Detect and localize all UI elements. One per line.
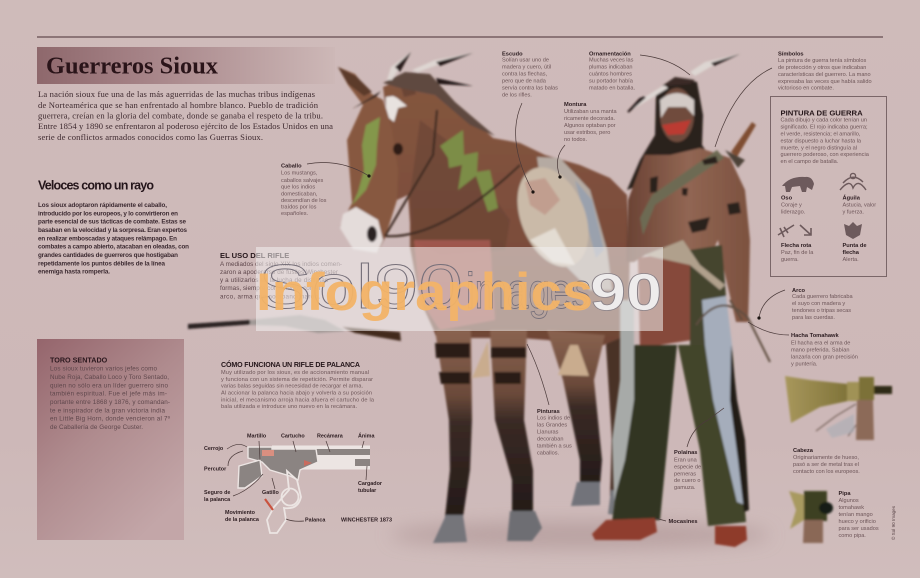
top rule [37, 36, 883, 38]
right chaps [702, 296, 745, 505]
panel: Pintura de guerra: muerte, y el negro distinguía al [780, 145, 857, 151]
callout: Montura [557, 102, 617, 179]
callout: Escudo: contra las flechas, [502, 72, 548, 78]
ground shadow [390, 521, 770, 549]
callout: Montura: Algunos optaban por [564, 123, 616, 129]
intro text: guerrera, creían en la gloria del combate, donde se ganaba el respeto de la tribu. [38, 110, 323, 120]
callout: Pinturas [527, 344, 572, 456]
text: Veloces: repetidamente los puntos débiles de la línea [38, 260, 165, 267]
panel: Pintura de guerra: Oso [781, 196, 793, 202]
front leg 2 [490, 330, 533, 512]
callout: Cabeza: Originariamente de hueso, [793, 455, 859, 461]
callout: Polainas: Polainas [674, 450, 697, 456]
callout: Ornamentación: Ornamentación [589, 52, 631, 58]
callout: Cabeza: pasó a ser de metal tras el [793, 462, 859, 468]
heading and text: Cómo funciona un rifle de palanca: bala utilizada e introduce uno nuevo en la recámara. [221, 404, 357, 410]
callout: Hacha Tomahawk: El hacha era el arma de [791, 340, 850, 346]
panel: Pintura de guerra: Cada dibujo y cada color tenían un [780, 118, 867, 124]
front leg 1 hoof [433, 515, 467, 543]
strap [640, 150, 724, 235]
small handle [803, 520, 823, 543]
panel: Toro Sentado [37, 339, 184, 540]
red firing detail [262, 450, 274, 456]
receiver [248, 447, 318, 480]
callout: Caballo: Los mustangs, [281, 171, 318, 177]
callout: El uso del rifle: EL USO DEL RIFLE [220, 251, 289, 260]
left leg [612, 345, 677, 522]
callout: Ornamentación: cuántos hombres [589, 72, 632, 78]
diagram: lever-action rifle: Seguro de [204, 490, 230, 496]
panel: Pintura de guerra: y fuerza. [842, 210, 864, 216]
panel: Pintura de guerra: flecha [842, 250, 860, 256]
watermark: 90 [590, 264, 662, 322]
barrel assembly [272, 446, 370, 470]
callout: El uso del rifle: arco, arma que no abandonaron. [220, 294, 320, 300]
heading and text: Cómo funciona un rifle de palanca: Muy utilizado por los sioux, es de accionamiento manual [221, 370, 369, 376]
green war paint head [352, 117, 380, 205]
callout: Pipa: Algunos [838, 498, 859, 504]
intro text: de Norteamérica que se han enfrentado al hombre blanco. Pueblo de tradición [38, 100, 319, 110]
green war paint neck [440, 130, 498, 212]
quiver arrows [731, 122, 756, 157]
callout: Pinturas: caballos. [537, 450, 560, 456]
horse [338, 52, 630, 345]
face paint white [660, 93, 694, 118]
callout: Mocasines [655, 518, 698, 525]
leg bands [435, 343, 526, 384]
panel: Toro Sentado: TORO SENTADO [50, 356, 108, 364]
panel: Toro Sentado: de Caballería de George Custer. [50, 424, 143, 431]
panel: Toro Sentado: te e inspirador de la gran victoria india [50, 407, 165, 414]
diagram: lever-action rifle: de la palanca [225, 517, 260, 523]
callout: Escudo: pero que de nada [502, 78, 547, 84]
text: Veloces [38, 202, 189, 276]
panel: Pintura de guerra: Astucia, valor [842, 203, 876, 209]
front leg 1 [435, 330, 472, 517]
panel: Pintura de guerra [770, 96, 886, 276]
warrior [592, 54, 770, 547]
horse legs [433, 330, 605, 543]
watermark: Sol90 [258, 253, 463, 322]
callout: Arco: Arco [792, 288, 805, 294]
intro text: La nación sioux fue una de las más aguerridas de las muchas tribus indígenas [38, 89, 316, 99]
callout: Montura: usar estribos, pero [564, 130, 610, 136]
panel: Pintura de guerra: guerrero poderoso, con experiencia [780, 152, 870, 158]
diagram: lever-action rifle: la palanca [204, 497, 231, 503]
blade [785, 376, 848, 423]
diagram: lever-action rifle: Percutor [204, 466, 227, 472]
callout: Arco: tendones o tripas secas [792, 308, 851, 314]
callout: Símbolos: de protección y otros que indicaban [778, 65, 866, 71]
callout: Pinturas: Llanuras [537, 430, 559, 436]
callout: Símbolos: La pintura de guerra tenía símbolos [778, 58, 867, 64]
callout: El uso del rifle: y a utilizarlos en la lucha de distintas [220, 277, 328, 284]
horse feathers [352, 52, 473, 109]
intro text [38, 89, 333, 142]
credit: © Sol 90 Images [890, 505, 896, 540]
callout: Pipa: como pipa. [838, 533, 866, 539]
bridle [385, 110, 520, 236]
heading and text: Cómo funciona un rifle de palanca: CÓMO FUNCIONA UN RIFLE DE PALANCA [221, 360, 360, 369]
feathers [628, 54, 740, 112]
leaders [227, 441, 367, 521]
watermark: images [466, 263, 591, 319]
callout: Montura: Utilizaban una manta [564, 109, 617, 115]
horse body and neck [383, 77, 630, 345]
panel: Pintura de guerra: Alerta. [842, 257, 859, 263]
diagram: lever-action rifle: WINCHESTER 1873 [341, 518, 392, 524]
panel: Toro Sentado: quien no sólo era un líder guerrero sino [50, 382, 168, 389]
icon: eagle [840, 173, 866, 190]
callout: Escudo: de los rifles. [502, 92, 532, 98]
callout: Arco: Cada guerrero fabricaba [792, 294, 854, 300]
dark tattoos [650, 156, 741, 233]
lever [267, 471, 301, 533]
handle [856, 400, 874, 440]
watermark: Infographics [256, 263, 593, 322]
panel: Pintura de guerra: guerra. [781, 257, 799, 263]
callout: El uso del rifle: A mediados del siglo XIX los indios comen- [220, 261, 342, 268]
pipe bowl [819, 502, 833, 514]
head [660, 88, 694, 142]
loin cloth [690, 245, 730, 350]
diagram: lever-action rifle: Gatillo [262, 490, 279, 496]
bow [696, 300, 770, 362]
socket [847, 382, 859, 401]
callout: Pipa: para ser usados [838, 526, 879, 532]
callout: Polainas: de cuero o [674, 478, 700, 484]
diagram: lever-action rifle: Palanca [305, 518, 326, 524]
left moccasin [592, 518, 657, 540]
diagram: lever-action rifle: Ánima [358, 433, 375, 440]
diagram: lever-action rifle [204, 433, 392, 533]
rear leg hoof [571, 482, 600, 506]
diagram: lever-action rifle: tubular [358, 488, 377, 494]
torso and arms [626, 148, 750, 322]
callout: Montura: Montura [564, 102, 587, 108]
rear leg [547, 330, 605, 485]
forelock white feather [386, 96, 407, 122]
callout: El uso del rifle [220, 251, 342, 300]
callout: Cabeza [793, 448, 860, 475]
right moccasin [715, 526, 747, 547]
belt [645, 240, 725, 290]
saddle blanket [537, 157, 612, 290]
panel: Pintura de guerra: Flecha rota [781, 243, 812, 249]
trigger guard [282, 488, 298, 506]
panel: Pintura de guerra: en el campo de batalla. [780, 159, 839, 165]
icon: broken arrow [778, 225, 811, 237]
text: Veloces: Los sioux adoptaron rápidamente el caballo, [38, 202, 167, 209]
horse rear leg behind [605, 330, 628, 516]
panel: Pintura de guerra: el verde, resistencia; el amarillo, [780, 131, 861, 137]
callout: Símbolos: expresaba las veces que había salido [778, 79, 872, 85]
leg tassels [472, 341, 589, 378]
callout: Escudo: Escudo [502, 52, 523, 58]
callout: Hacha Tomahawk [748, 322, 858, 368]
icon: arrowhead [844, 222, 862, 239]
left chaps [612, 300, 634, 500]
panel: Toro Sentado: Nube Roja, Caballo Loco y Toro Sentado, [50, 374, 169, 381]
panel: Pintura de guerra: liderazgo. [781, 210, 806, 216]
text: Veloces: basaban en la velocidad y la sorpresa. Eran expertos [38, 227, 187, 234]
butt [238, 460, 262, 488]
hair [627, 78, 712, 190]
callout: Ornamentación: su portador había [589, 78, 634, 84]
panel: Toro Sentado: también espiritual. Fue el jefe más im- [50, 390, 167, 398]
diagram labels: Martillo [247, 434, 267, 440]
callout: Símbolos: Símbolos [778, 52, 804, 58]
text: Veloces: grandes cantidades de guerreros que hostigaban [38, 252, 178, 259]
callout: Polainas: Eran una [674, 458, 698, 464]
stud [874, 386, 892, 394]
text: Veloces: enemiga hasta romperla. [38, 269, 110, 276]
callout: Símbolos: victorioso en combate. [778, 86, 834, 92]
diagram: lever-action rifle: Cargador [358, 481, 383, 487]
diagram: lever-action rifle: Recámara [317, 434, 344, 440]
callout: Mocasines: Mocasines [668, 519, 698, 525]
callout: Arco [757, 288, 854, 321]
callout: Ornamentación [589, 52, 690, 92]
mane [383, 72, 495, 136]
callout: Polainas [674, 408, 724, 491]
intro text: Entre 1854 y 1890 se enfrentaron al poderoso ejército de los Estados Unidos en una [38, 121, 333, 131]
rifle illustration [188, 315, 401, 341]
callout: Caballo: caballos salvajes [281, 178, 323, 184]
heading and text: Cómo funciona un rifle de palanca: y funciona con un sistema de repetición. Permite disparar [221, 377, 373, 383]
callout: Caballo [281, 162, 371, 217]
eye [393, 143, 403, 155]
panel: Pintura de guerra: Águila [842, 194, 861, 202]
title banner [37, 47, 335, 84]
callout: Cabeza: Cabeza [793, 448, 814, 454]
callout: Arco: el suyo con madera y [792, 301, 845, 307]
callout: Polainas: especie de [674, 464, 701, 470]
callout: Polainas: gamuza. [674, 485, 696, 491]
panel: Toro Sentado: en Little Big Horn, donde vencieron al 7º [50, 416, 171, 422]
heading and text: Cómo funciona un rifle de palanca: varias balas seguidas sin necesidad de recargar el arma. [221, 384, 363, 390]
muzzle [340, 207, 383, 253]
callout: Pipa: hueco y orificio [838, 519, 876, 525]
chest paint [414, 240, 495, 330]
callout: Montura: ricamente decorada. [564, 116, 615, 122]
front leg 2 hoof [507, 511, 542, 541]
watermark [256, 247, 663, 331]
callout: Arco: para las cuerdas. [792, 315, 835, 321]
callout: Caballo: españoles. [281, 211, 309, 217]
panel: Pintura de guerra: estar dispuesto a luchar hasta la [780, 139, 862, 145]
callout: Escudo [502, 52, 558, 194]
title banner: Guerreros Sioux [46, 54, 218, 80]
callout: Pinturas: Los indios de [537, 416, 570, 422]
shield [504, 157, 602, 277]
neck shading [410, 120, 510, 255]
callout: Pinturas: las Grandes [537, 422, 567, 428]
text: Veloces: combates a campo abierto, atacaban en oleadas, con [38, 244, 189, 251]
fringe [730, 345, 749, 512]
panel: Pintura de guerra: significado. El rojo indicaba guerra; [780, 125, 868, 131]
callout: Pipa: tenían mango [838, 512, 873, 518]
callout: Ornamentación: Muchas veces las [589, 58, 634, 64]
heading: Veloces como un rayo: Veloces como un rayo [38, 178, 154, 192]
heading and text: Cómo funciona un rifle de palanca: inicial, el mecanismo arroja hacia afuera el cartucho de la [221, 397, 375, 403]
callout: Pipa [838, 491, 879, 539]
callout: Pipa: tomahawk [838, 505, 864, 511]
pipe tomahawk illustration [789, 491, 833, 543]
callout: Caballo: que los indios [281, 185, 315, 191]
diagram: lever-action rifle: Movimiento [225, 510, 256, 516]
callout: El uso del rifle: formas, siempre combinados con el [220, 285, 320, 292]
text: Veloces: introducido por los europeos, y lo convirtieron en [38, 210, 178, 217]
callout: Pinturas: también a sus [537, 444, 572, 450]
receiver [250, 315, 345, 333]
lever movement arrow [265, 499, 273, 510]
callout: Pipa: Pipa [838, 491, 851, 497]
callout: Hacha Tomahawk: mano preferida. Sabían [791, 348, 849, 354]
panel: Pintura de guerra: Paz, fin de la [781, 250, 814, 256]
callout: El uso del rifle: zaron a apoderarse de fusiles Winchester [220, 269, 338, 276]
panel: Pintura de guerra: Coraje y [781, 203, 802, 209]
right leg [678, 345, 746, 526]
callout: Hacha Tomahawk: lanzarla con gran precisión [791, 354, 858, 360]
callout: Ornamentación: plumas indicaban [589, 64, 633, 70]
diagram: lever-action rifle: Cartucho [281, 434, 305, 440]
heading and text: Cómo funciona un rifle de palanca [221, 360, 375, 410]
callout: Pinturas: decoraban [537, 436, 563, 442]
callout: Caballo: traídos por los [281, 205, 317, 211]
callout: Caballo: domesticaban, [281, 191, 318, 197]
callout: Montura: no todos. [564, 137, 587, 143]
callout: Hacha Tomahawk: Hacha Tomahawk [791, 333, 839, 339]
callout: Caballo: Caballo [281, 164, 302, 170]
tomahawk illustration [785, 376, 892, 440]
ear [338, 67, 372, 96]
small blade [789, 491, 805, 529]
heading and text: Cómo funciona un rifle de palanca: Al accionar la palanca hacia abajo y volverla a su posición [221, 390, 372, 396]
stock [342, 327, 401, 341]
callout: Escudo: madera y cuero, útil [502, 64, 551, 70]
callout: Escudo: Solían usar uno de [502, 58, 549, 64]
callout: Ornamentación: matado en batalla. [589, 86, 635, 92]
callout: Polainas: perneras [674, 472, 696, 478]
callout: Símbolos [715, 52, 872, 147]
callout: Escudo: servía contra las balas [502, 86, 558, 92]
kilt [638, 250, 692, 348]
panel: Pintura de guerra: Punta de [842, 243, 867, 249]
intro text: serie de conflictos armados conocidos como las Guerras Sioux. [38, 132, 263, 142]
icon: bear [782, 177, 814, 192]
panel: Toro Sentado: portante entre 1868 y 1876, y comandan- [50, 399, 170, 406]
callout: Pinturas: Pinturas [537, 409, 560, 415]
text: Veloces: parte esencial de sus tácticas de combate. Estas se [38, 219, 186, 226]
text: Veloces: en realizar emboscadas y ataques relámpago. En [38, 235, 177, 242]
callout: Cabeza: contacto con los europeos. [793, 469, 860, 475]
panel: Toro Sentado: Los sioux tuvieron varios jefes como [50, 366, 157, 372]
callout: Símbolos: características del guerrero. La mano [778, 72, 871, 78]
panel: Pintura de guerra: PINTURA DE GUERRA [780, 108, 863, 118]
diagram: lever-action rifle: Cerrojo [204, 446, 224, 452]
small head [804, 491, 827, 521]
callout: Caballo: descendían de los [281, 198, 327, 204]
callout: Hacha Tomahawk: y puntería. [791, 362, 818, 368]
fringe [816, 404, 856, 436]
face paint red [662, 120, 691, 135]
horse head [338, 67, 398, 253]
barrel [188, 320, 256, 329]
